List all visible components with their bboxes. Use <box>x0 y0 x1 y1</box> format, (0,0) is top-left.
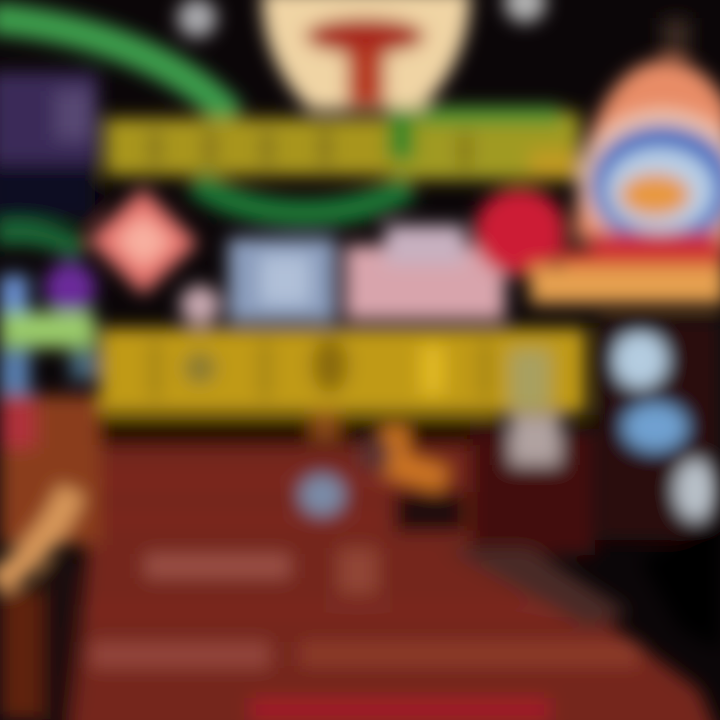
blue and pink signs <box>228 225 505 322</box>
red blob <box>474 188 566 276</box>
face at top <box>262 0 470 110</box>
floor <box>70 418 720 720</box>
lower yellow sign <box>100 328 586 414</box>
ceiling lights <box>177 0 690 56</box>
pink diamond <box>88 188 198 295</box>
upper yellow sign <box>105 106 580 180</box>
right dark panel <box>600 320 720 650</box>
left side toys <box>0 233 220 395</box>
lower green arc <box>195 180 410 213</box>
figures below sign <box>300 410 560 532</box>
right lights <box>613 332 715 520</box>
circus tent <box>530 60 720 304</box>
upper green arc <box>0 18 232 118</box>
purple panel <box>0 72 98 220</box>
left wall panel <box>0 395 100 720</box>
